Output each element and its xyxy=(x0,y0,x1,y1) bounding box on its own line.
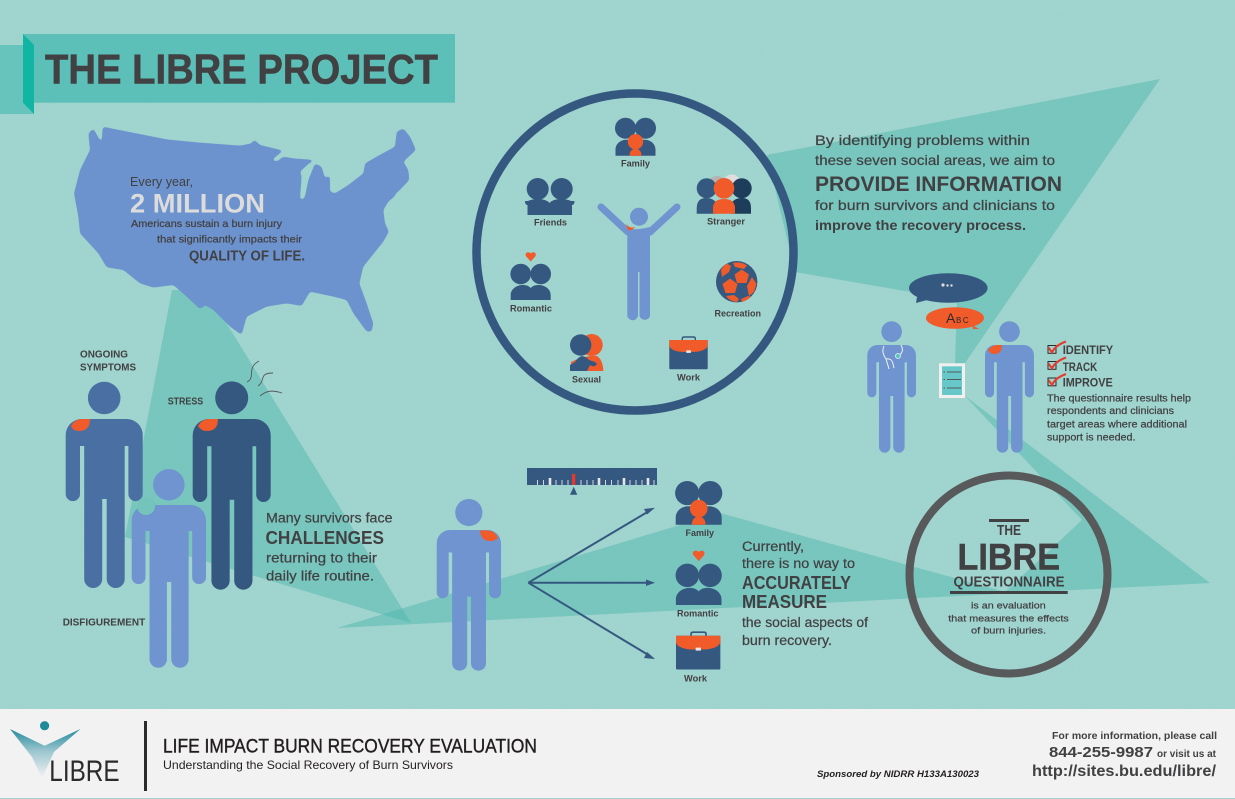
questionnaire heading: THE xyxy=(997,522,1021,539)
questionnaire heading: LIBRE xyxy=(958,536,1060,577)
checklist: IMPROVE xyxy=(1063,378,1113,390)
icon: romantic xyxy=(676,551,722,619)
figure: clinician with stethoscope xyxy=(867,321,916,453)
contact information: For more information, please call xyxy=(1052,730,1217,742)
figure: respondent xyxy=(985,321,1034,453)
speech bubble: respondent: BC xyxy=(956,316,970,325)
contact information xyxy=(1032,730,1217,780)
footer xyxy=(0,709,1235,798)
icon: stranger xyxy=(697,174,752,226)
text: accurately measure xyxy=(742,539,868,648)
title banner xyxy=(0,34,455,114)
text: accurately measure: ACCURATELY xyxy=(742,573,851,593)
figure: survivor xyxy=(437,499,501,671)
icon: work briefcase xyxy=(676,632,720,684)
statistic text: 2 MILLION xyxy=(130,189,265,219)
text: questionnaire results: The questionnaire results help xyxy=(1047,393,1191,404)
figure: stress xyxy=(193,361,282,590)
icon: stranger: Stranger xyxy=(707,216,746,226)
figure labels: SYMPTOMS xyxy=(80,363,136,374)
text: provide information: for burn survivors and clinicians to xyxy=(815,197,1055,213)
text: provide information xyxy=(815,132,1062,233)
questionnaire description: is an evaluation xyxy=(971,601,1046,612)
panel: measuring social recovery xyxy=(437,468,868,684)
speech bubble: respondent xyxy=(926,307,984,329)
icon: friends xyxy=(525,178,574,228)
statistic text: that significantly impacts their xyxy=(157,235,303,246)
arrows xyxy=(528,508,655,659)
light beam: measure to questionnaire xyxy=(337,396,1210,628)
panel: LIBRE questionnaire circle xyxy=(910,476,1108,674)
text: accurately measure: the social aspects of xyxy=(742,615,868,630)
icon: family xyxy=(615,118,656,169)
figure labels: DISFIGUREMENT xyxy=(63,618,145,629)
icon: sexual: Sexual xyxy=(572,375,601,385)
text: provide information: PROVIDE INFORMATION xyxy=(815,173,1062,196)
text: accurately measure: Currently, xyxy=(742,539,804,554)
icon: family xyxy=(675,481,722,538)
footer title: LIFE IMPACT BURN RECOVERY EVALUATION xyxy=(163,736,537,758)
icon: sexual xyxy=(570,334,603,385)
figure: ongoing symptoms xyxy=(66,382,143,588)
icon: romantic: Romantic xyxy=(677,609,718,619)
panel: clinician and respondent xyxy=(867,273,1191,453)
questionnaire heading xyxy=(954,522,1065,591)
text: accurately measure: MEASURE xyxy=(742,592,827,612)
icon: work briefcase: Work xyxy=(677,373,701,383)
questionnaire description xyxy=(948,601,1069,636)
ring xyxy=(476,94,794,410)
speech bubble: clinician xyxy=(909,273,988,303)
challenges text: Many survivors face xyxy=(266,511,392,526)
footer title: Understanding the Social Recovery of Burn Survivors xyxy=(163,759,453,772)
icon: work briefcase xyxy=(669,337,708,383)
text: provide information: these seven social areas, we aim to xyxy=(815,152,1055,168)
icon: family: Family xyxy=(621,159,650,169)
map of the United States xyxy=(74,127,416,335)
top rule xyxy=(989,519,1029,522)
text: provide information: By identifying problems within xyxy=(815,132,1030,148)
figure labels: STRESS xyxy=(168,397,203,408)
central figure with raised arms xyxy=(601,207,677,320)
text: accurately measure: there is no way to xyxy=(742,556,855,571)
challenges text xyxy=(266,511,392,584)
text: accurately measure: burn recovery. xyxy=(742,633,832,648)
icon: family: Family xyxy=(686,528,714,538)
icon: work briefcase: Work xyxy=(684,674,708,684)
figure labels xyxy=(63,350,203,629)
questionnaire heading: QUESTIONNAIRE xyxy=(954,575,1065,591)
icon: measuring scale xyxy=(527,468,657,495)
checklist: TRACK xyxy=(1063,362,1098,374)
checklist xyxy=(1048,342,1114,390)
panel: US map with statistic xyxy=(74,127,416,335)
LIBRE logo: LIBRE xyxy=(49,755,120,788)
challenges text: daily life routine. xyxy=(266,569,374,584)
footer title xyxy=(163,736,537,772)
panel: survivors face challenges xyxy=(63,350,392,668)
icon: questionnaire clipboard xyxy=(940,365,964,396)
contact information: http://sites.bu.edu/libre/ xyxy=(1032,763,1217,780)
icon: friends: Friends xyxy=(534,218,567,228)
icon: romantic: Romantic xyxy=(510,304,552,314)
statistic text: QUALITY OF LIFE. xyxy=(189,249,305,265)
light beam: seven social areas xyxy=(767,79,1160,365)
figure labels: ONGOING xyxy=(80,350,128,361)
LIBRE logo xyxy=(10,721,120,788)
icon: romantic xyxy=(510,252,552,314)
icon: recreation ball: Recreation xyxy=(714,309,761,319)
text: questionnaire results: support is needed. xyxy=(1047,433,1136,444)
challenges text: returning to their xyxy=(266,550,378,565)
challenges text: CHALLENGES xyxy=(266,528,384,548)
text: questionnaire results: respondents and clinicians xyxy=(1047,406,1174,417)
sponsor: Sponsored by NIDRR H133A130023 xyxy=(817,769,980,780)
questionnaire description: of burn injuries. xyxy=(971,625,1046,636)
bottom rule xyxy=(950,591,1068,594)
checklist: IDENTIFY xyxy=(1063,345,1114,357)
panel: seven social areas circle xyxy=(476,94,794,410)
statistic text: Every year, xyxy=(130,175,193,189)
statistic text: Americans sustain a burn injury xyxy=(131,219,283,230)
contact information: 844-255-9987 xyxy=(1049,745,1153,761)
divider xyxy=(144,721,147,791)
speech bubble: respondent: A xyxy=(946,310,956,326)
text: questionnaire results: target areas where additional xyxy=(1047,419,1187,430)
light beam: map to challenges xyxy=(125,290,411,623)
text: questionnaire results xyxy=(1047,393,1191,444)
questionnaire description: that measures the effects xyxy=(948,613,1069,624)
statistic text xyxy=(130,175,305,265)
contact information: or visit us at xyxy=(1157,749,1217,760)
ring xyxy=(910,476,1108,674)
text: provide information: improve the recovery process. xyxy=(815,217,1026,233)
figure: disfigurement xyxy=(132,469,206,668)
icon: recreation ball xyxy=(714,261,761,319)
title: THE LIBRE PROJECT xyxy=(45,46,438,92)
